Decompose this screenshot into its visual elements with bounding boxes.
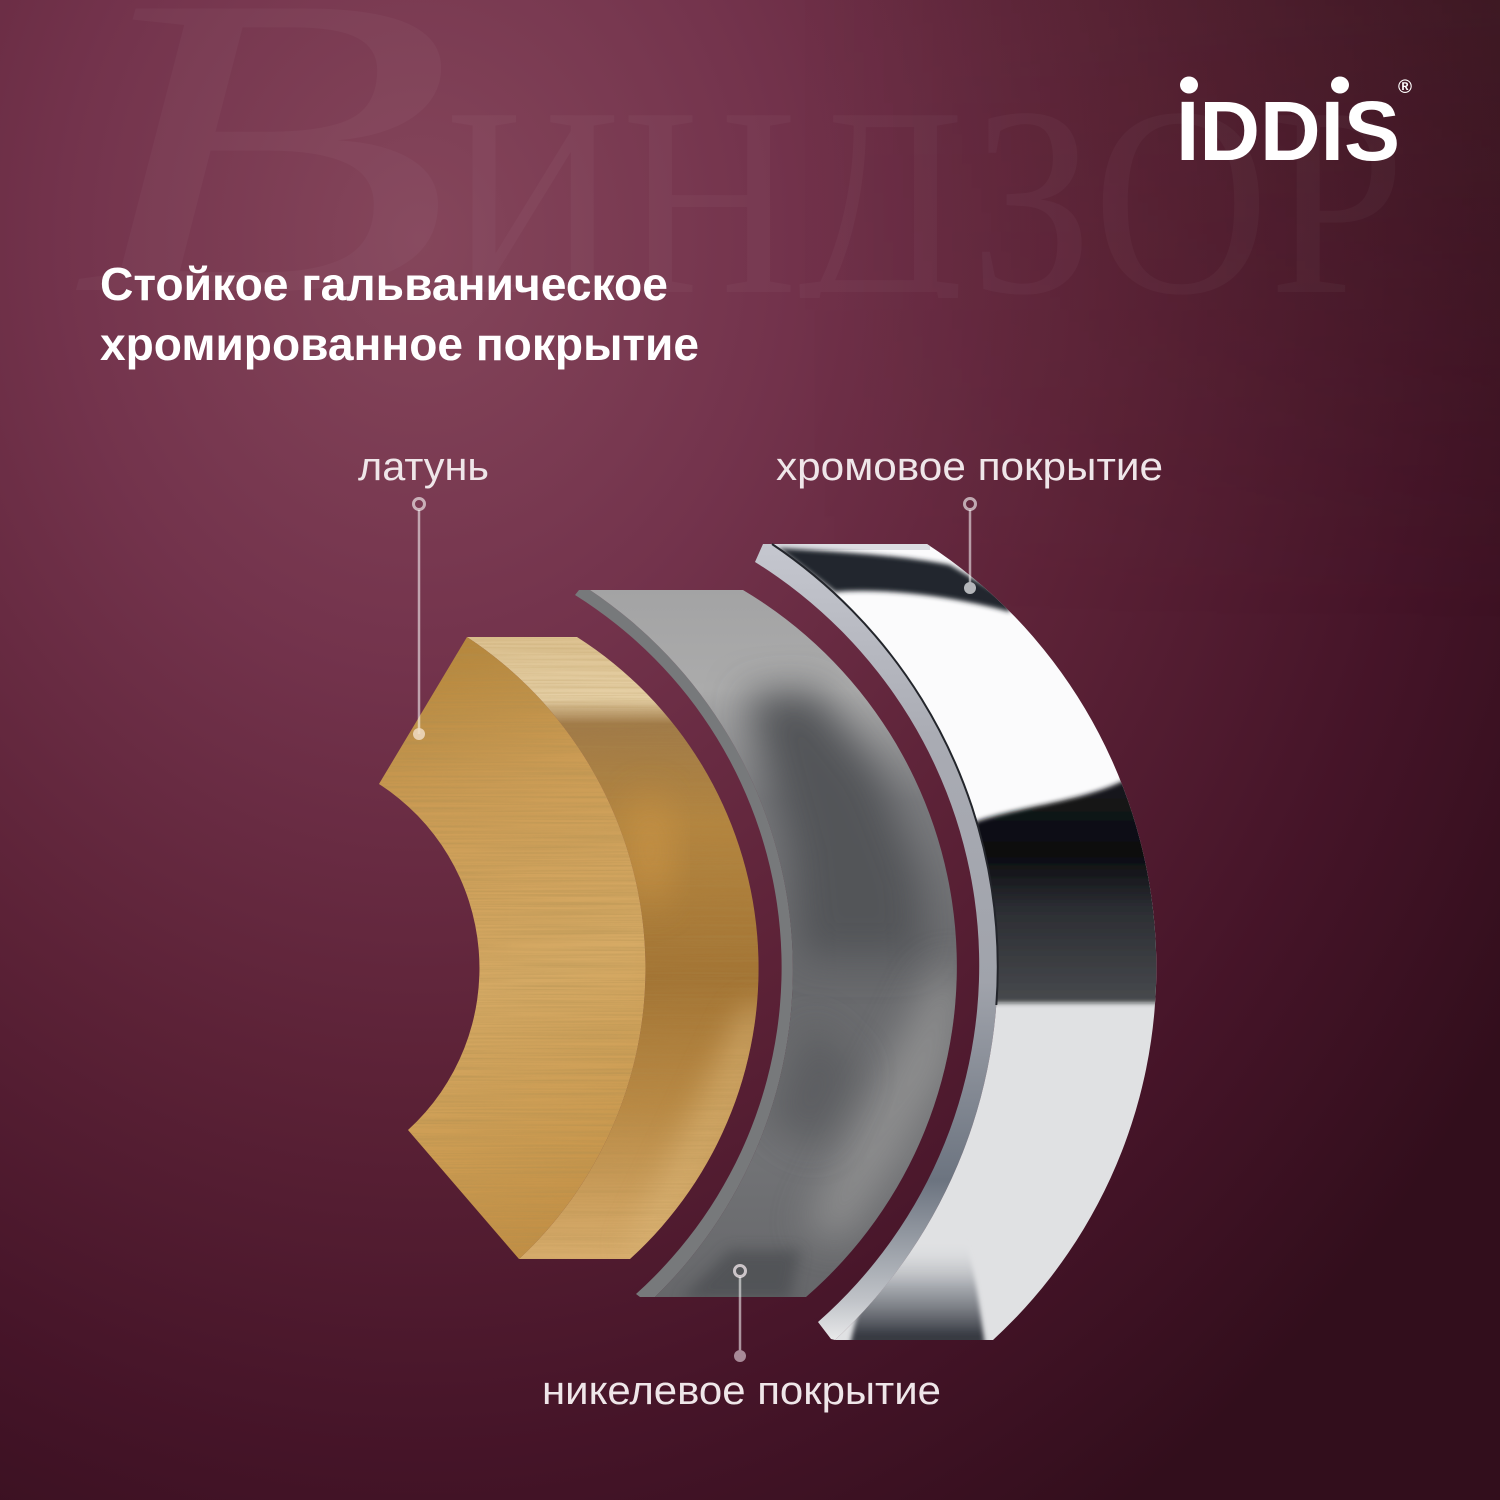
- logo: IDDIS: ®: [1398, 77, 1412, 98]
- chrome face: [760, 540, 1175, 1345]
- callout: latun: [358, 445, 489, 740]
- watermark: collection name: ИНДЗОР: [445, 52, 1405, 351]
- callout: nickel coating: [542, 1266, 941, 1413]
- callout: chrome coating: хромовое покрытие: [776, 445, 1163, 489]
- callout: nickel coating: никелевое покрытие: [542, 1369, 941, 1413]
- title: Стойкое гальваническое: [100, 258, 668, 310]
- nickel face: [580, 585, 970, 1300]
- logo: IDDIS: IDDIS: [1176, 84, 1400, 178]
- callout: latun: латунь: [358, 445, 489, 489]
- brass front face: [370, 630, 660, 1265]
- brass layer: [370, 630, 770, 1265]
- callout: chrome coating: [776, 445, 1163, 594]
- nickel edge band: [575, 590, 793, 1297]
- chrome edge line: [772, 543, 999, 1005]
- chrome layer: [755, 540, 1175, 1345]
- nickel layer: [575, 585, 970, 1300]
- chrome edge band: [755, 544, 998, 1340]
- title: хромированное покрытие: [100, 318, 699, 370]
- watermark: collection name: [70, 0, 1405, 384]
- title: [100, 258, 699, 370]
- brass side face: [460, 630, 770, 1265]
